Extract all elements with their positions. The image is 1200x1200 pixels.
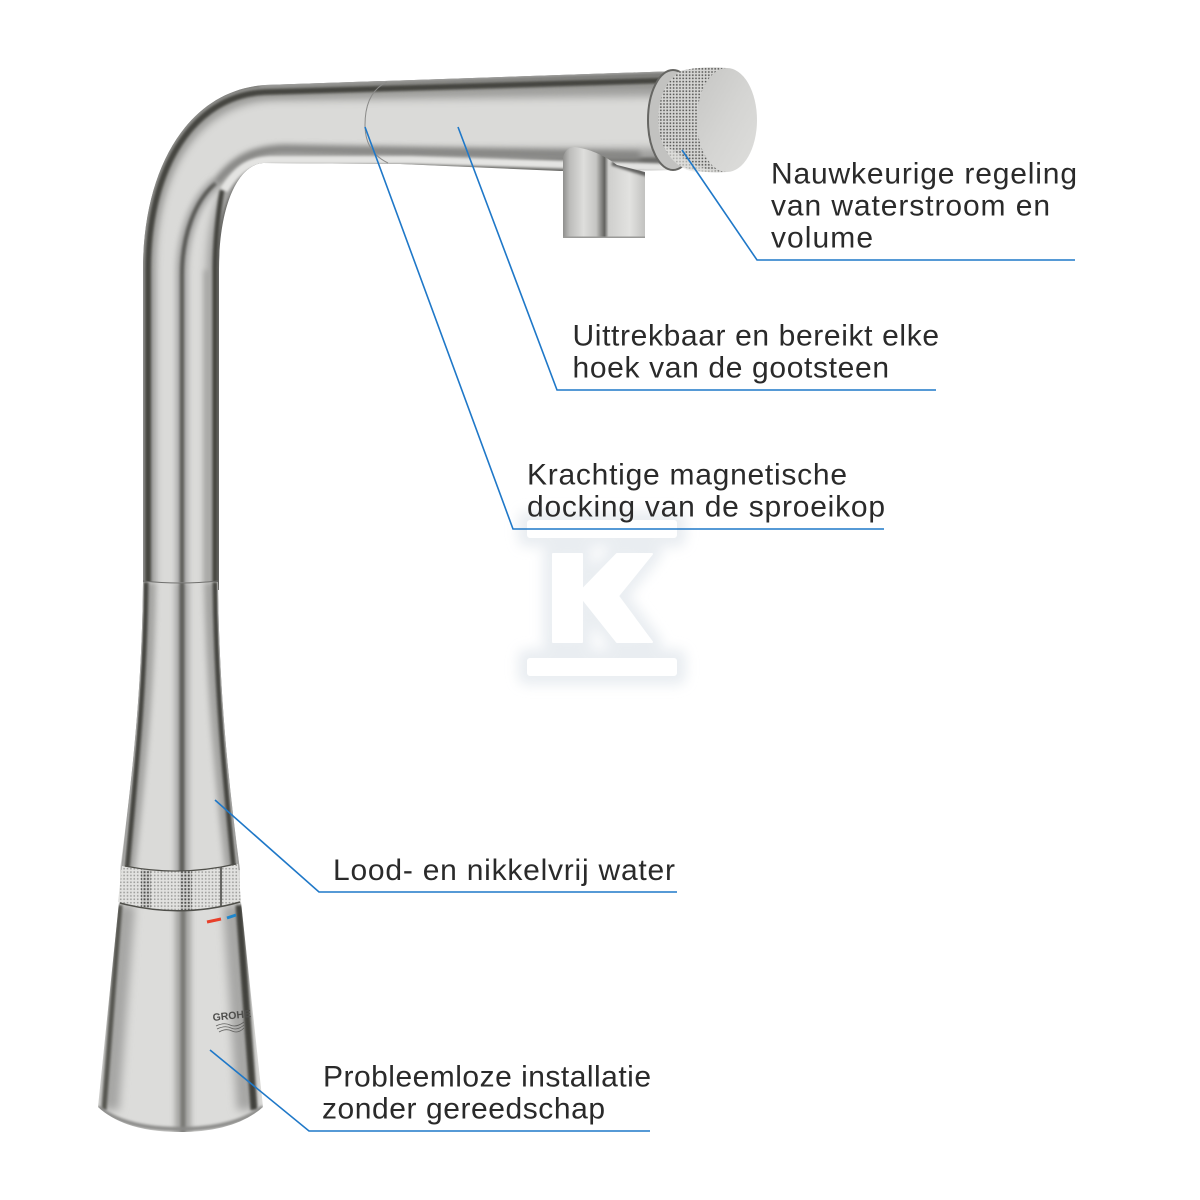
knob end disk bbox=[697, 68, 757, 172]
hot and cold markers bbox=[207, 915, 236, 922]
callout: control knob: Nauwkeurige regeling bbox=[771, 158, 1077, 190]
callout: control knob bbox=[682, 150, 1077, 260]
seam: pull-out spray head bbox=[365, 82, 388, 163]
callout: lead and nickel free bbox=[215, 800, 677, 892]
callout: installation: zonder gereedschap bbox=[322, 1092, 605, 1126]
callout: installation bbox=[210, 1050, 651, 1131]
callout: pull-out: Uittrekbaar en bereikt elke bbox=[572, 320, 939, 352]
callout: control knob: van waterstroom en bbox=[771, 190, 1050, 222]
callout: pull-out bbox=[458, 127, 939, 390]
watermark: K logo bbox=[527, 520, 677, 676]
callout: pull-out: hoek van de gootsteen bbox=[572, 352, 889, 384]
faucet bbox=[95, 65, 757, 1135]
callout: installation: Probleemloze installatie bbox=[323, 1060, 651, 1094]
lower body upper taper bbox=[115, 580, 245, 885]
callout: magnetic docking: Krachtige magnetische bbox=[527, 458, 847, 492]
GROHE logo: GROHE bbox=[212, 1008, 252, 1024]
callout: control knob: volume bbox=[771, 222, 873, 254]
GROHE logo bbox=[212, 1008, 252, 1032]
seam: riser joint bbox=[143, 581, 218, 583]
knob collar bbox=[648, 70, 698, 170]
callout: lead and nickel free: Lood- en nikkelvrij water bbox=[333, 854, 675, 887]
faucet riser and curved arm bbox=[140, 65, 690, 600]
callout: magnetic docking: docking van de sproeikop bbox=[527, 490, 885, 524]
knurled control knob bbox=[658, 67, 757, 172]
knurled ring bbox=[118, 864, 241, 912]
base cone bbox=[95, 895, 265, 1135]
faucet spout outlet bbox=[563, 145, 650, 238]
callout: magnetic docking bbox=[365, 127, 885, 529]
